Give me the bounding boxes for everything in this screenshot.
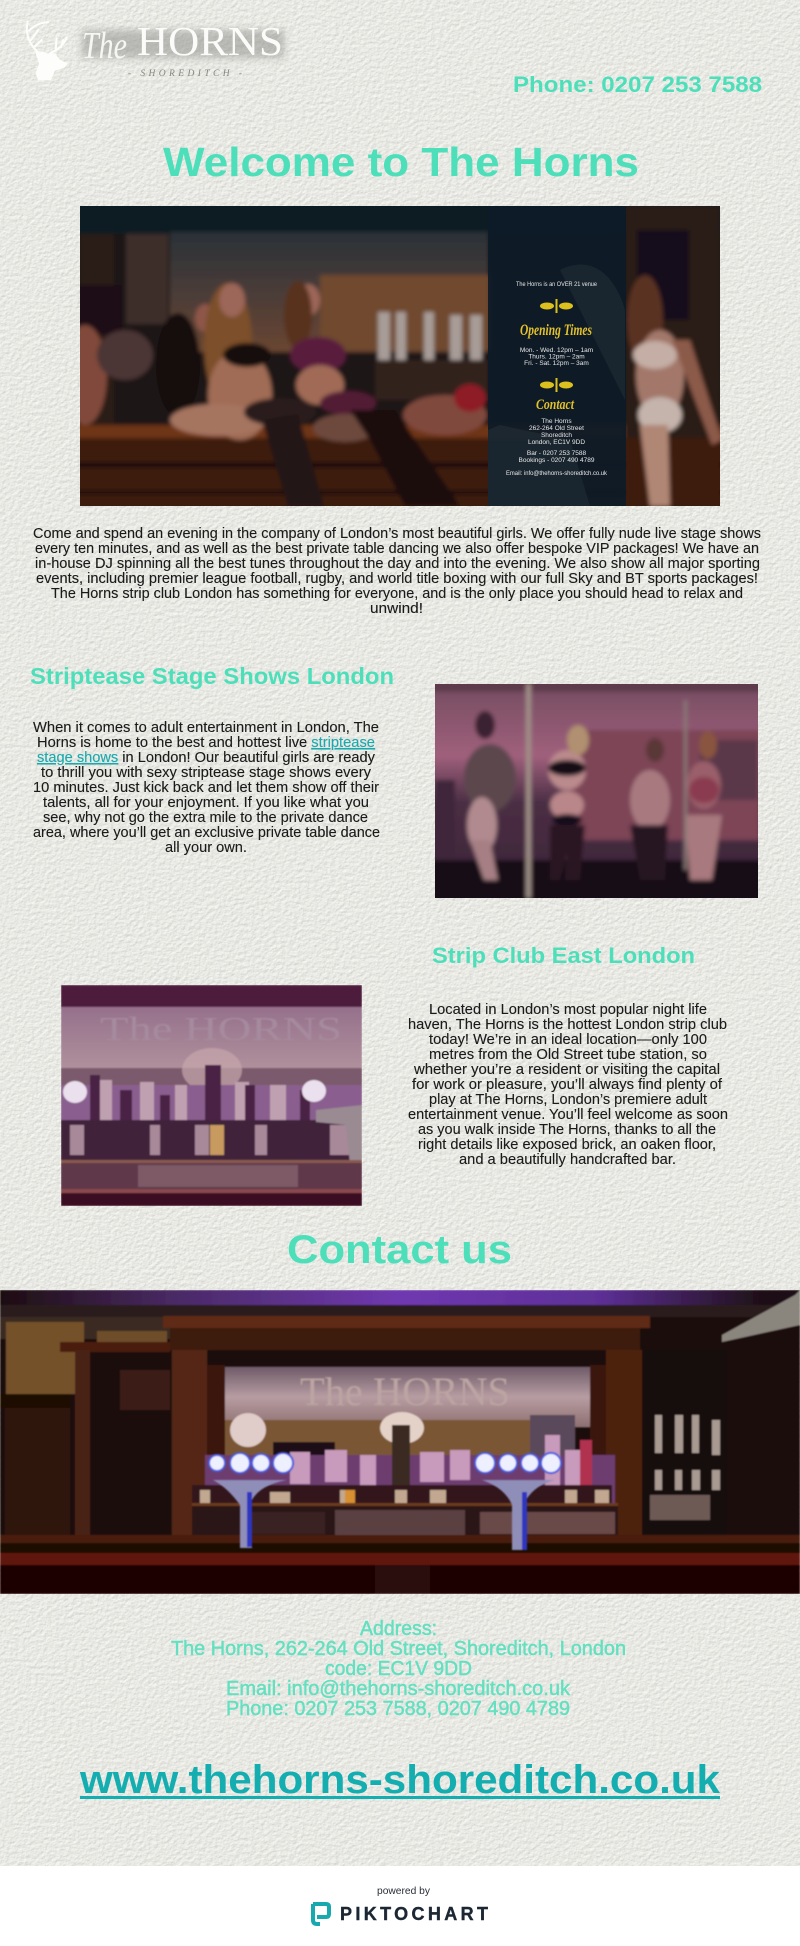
intro paragraph: Come and spend an evening in the company of London’s most beautiful girls. We offer fully nude live stage shows	[33, 525, 761, 542]
paragraph: strip club east london: today! We’re in an ideal location—only 100	[429, 1031, 707, 1048]
intro paragraph: in-house DJ spinning all the best tunes throughout the day and into the evening. We also show all major sporting	[35, 555, 760, 572]
footer	[0, 1866, 800, 1946]
heading: contact us: Contact us	[287, 1228, 512, 1272]
venue info panel: Fri. - Sat. 12pm – 3am	[524, 360, 589, 367]
icon: piktochart mark	[313, 1904, 329, 1924]
venue info panel: Bookings - 0207 490 4789	[519, 457, 595, 464]
mirror lettering: The HORNS	[300, 1369, 510, 1414]
venue info panel: 262-264 Old Street	[529, 425, 584, 432]
intro paragraph: The Horns strip club London has something for everyone, and is the only place you should head to relax and	[51, 585, 743, 602]
venue info panel	[488, 206, 626, 506]
paragraph: strip club east london	[408, 1001, 728, 1168]
heading: strip club east london: Strip Club East London	[432, 943, 695, 968]
contact address block: The Horns, 262-264 Old Street, Shoreditch, London	[171, 1638, 626, 1660]
contact address block: code: EC1V 9DD	[325, 1658, 472, 1680]
paragraph: strip club east london: metres from the Old Street tube station, so	[429, 1046, 707, 1063]
paragraph: striptease stage shows: to thrill you with sexy striptease stage shows every	[41, 764, 371, 781]
paragraph: strip club east london: haven, The Horns is the hottest London strip club	[408, 1016, 727, 1033]
paragraph: strip club east london: entertainment venue. You’ll feel welcome as soon	[408, 1106, 728, 1123]
paragraph: striptease stage shows: all your own.	[165, 839, 247, 856]
intro paragraph	[33, 525, 761, 617]
paragraph: striptease stage shows: stage shows in London! Our beautiful girls are ready	[37, 749, 375, 766]
paragraph: strip club east london: right details like exposed brick, an oaken floor,	[418, 1136, 716, 1153]
paragraph: strip club east london: for work or pleasure, you’ll always find plenty of	[412, 1076, 723, 1093]
paragraph: striptease stage shows: Horns is home to the best and hottest live striptease	[37, 734, 375, 751]
paragraph: striptease stage shows	[33, 719, 380, 856]
logo	[27, 18, 284, 81]
logo: - SHOREDITCH -	[128, 69, 242, 79]
heading: striptease stage shows: Striptease Stage Shows London	[30, 663, 394, 689]
intro paragraph: unwind!	[370, 600, 423, 617]
paragraph: striptease stage shows: 10 minutes. Just kick back and let them show off their	[33, 779, 379, 796]
venue info panel: Bar - 0207 253 7588	[527, 450, 587, 457]
photo: back bar bottles	[61, 985, 362, 1206]
venue info panel: Mon. - Wed. 12pm – 1am	[520, 347, 593, 354]
venue info panel: Thurs. 12pm – 2am	[528, 354, 585, 360]
paragraph: striptease stage shows: When it comes to adult entertainment in London, The	[33, 719, 379, 736]
venue info panel: The Horns is an OVER 21 venue	[516, 281, 597, 288]
phone number: Phone: 0207 253 7588	[513, 72, 762, 97]
photo: stage with poles	[435, 684, 758, 898]
intro paragraph: every ten minutes, and as well as the best private table dancing we also offer bespoke VIP packages! We have an	[35, 540, 759, 557]
contact address block	[171, 1618, 626, 1720]
logo: HORNS	[137, 18, 283, 64]
paragraph: strip club east london: and a beautifully handcrafted bar.	[459, 1151, 676, 1168]
paragraph: striptease stage shows: see, why not go the extra mile to the private dance	[43, 809, 368, 826]
mirror lettering: The HORNS	[100, 1011, 342, 1048]
venue info panel: Opening Times	[520, 322, 592, 339]
icon: ornament 2	[540, 378, 573, 392]
powered by: powered by	[377, 1886, 430, 1897]
venue info panel: Shoreditch	[541, 432, 572, 439]
right bar area	[626, 206, 720, 441]
title: Welcome to The Horns	[163, 139, 639, 185]
photo: full bar	[0, 1290, 800, 1594]
venue info panel: The Horns	[541, 418, 572, 425]
contact address block: Phone: 0207 253 7588, 0207 490 4789	[226, 1698, 570, 1720]
paragraph: striptease stage shows: area, where you’ll get an exclusive private table dance	[33, 824, 380, 841]
venue info panel: Contact	[536, 397, 575, 413]
contact address block: Email: info@thehorns-shoreditch.co.uk	[226, 1678, 571, 1700]
paragraph: strip club east london: Located in London’s most popular night life	[429, 1001, 707, 1018]
website link: www.thehorns-shoreditch.co.uk	[79, 1758, 721, 1802]
contact address block: Address:	[360, 1618, 437, 1640]
icon: stag head	[27, 22, 68, 81]
paragraph: strip club east london: whether you’re a resident or visiting the capital	[413, 1061, 720, 1078]
intro paragraph: events, including premier league football, rugby, and world title boxing with our full Sky and BT sports packages!	[36, 570, 758, 587]
logo: The	[82, 25, 127, 67]
piktochart wordmark: PIKTOCHART	[340, 1904, 488, 1924]
icon: ornament	[540, 299, 573, 313]
paragraph: strip club east london: play at The Horns, London’s premiere adult	[429, 1091, 708, 1108]
paragraph: strip club east london: as you walk inside The Horns, thanks to all the	[418, 1121, 716, 1138]
paragraph: striptease stage shows: talents, all for your enjoyment. If you like what you	[43, 794, 369, 811]
abstract tonal figures	[63, 281, 487, 506]
abstract tonal figures	[464, 711, 722, 880]
venue info panel: London, EC1V 9DD	[528, 439, 585, 446]
photo: bar hero with venue panel	[80, 206, 720, 506]
venue info panel: Email: info@thehorns-shoreditch.co.uk	[506, 470, 608, 477]
icon: beer taps	[209, 1453, 561, 1550]
